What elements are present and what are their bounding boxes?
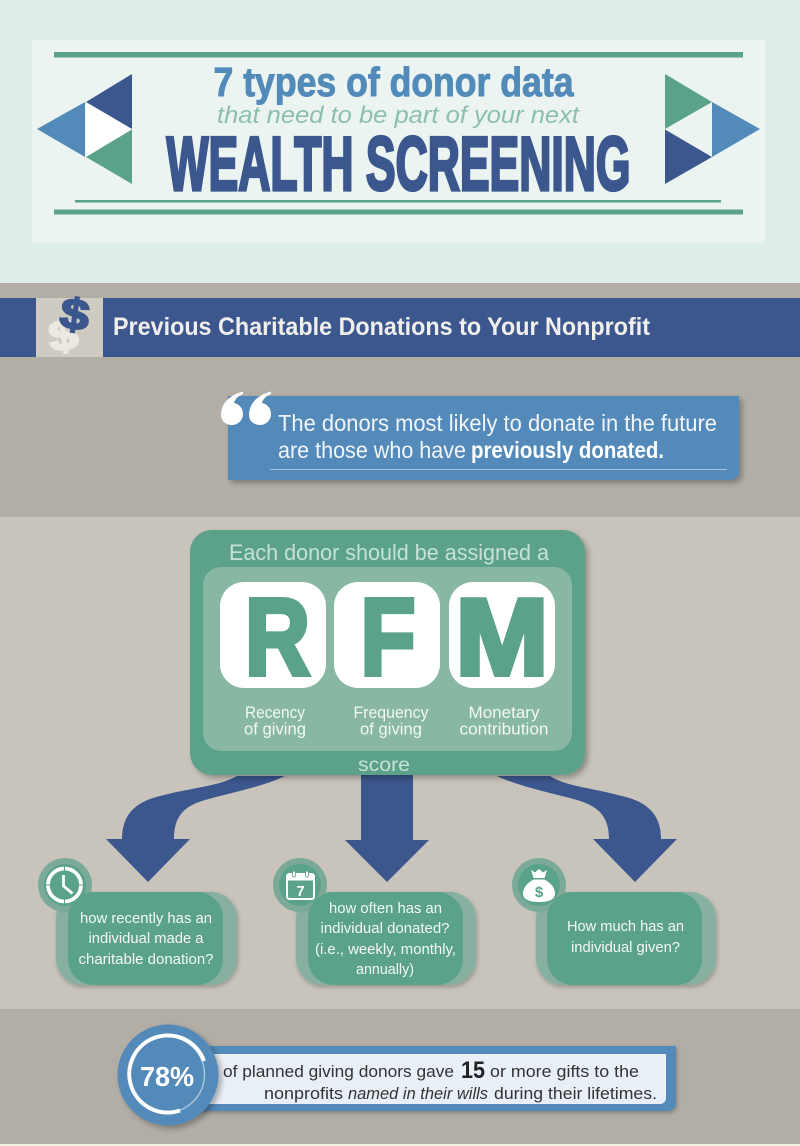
quote text: are those who have bbox=[278, 437, 466, 463]
badge: recency bbox=[38, 858, 92, 912]
card text: how recently has an bbox=[80, 910, 212, 927]
arrow: to recency bbox=[106, 776, 285, 882]
statistic text: of planned giving donors gave bbox=[223, 1062, 454, 1081]
tile: F: F bbox=[360, 576, 416, 698]
subheading: that need to be part of your next bbox=[217, 102, 580, 129]
card text: individual given? bbox=[571, 939, 680, 956]
card text: annually) bbox=[356, 961, 414, 978]
labels: recency frequency monetary: Recency bbox=[245, 704, 306, 722]
tile: F bbox=[334, 576, 440, 698]
section background: rfm bbox=[0, 517, 800, 1009]
icon: dollar signs: $ bbox=[46, 310, 81, 362]
labels: recency frequency monetary: Frequency bbox=[354, 704, 429, 722]
arrow: to frequency bbox=[345, 775, 429, 882]
card text: (i.e., weekly, monthly, bbox=[315, 941, 456, 958]
label: score: score bbox=[358, 755, 410, 776]
card text bbox=[567, 918, 684, 956]
footer edge bbox=[0, 1144, 800, 1146]
section background: statistic bbox=[0, 1009, 800, 1144]
card text bbox=[315, 900, 456, 978]
stat circle: 78% bbox=[118, 1024, 218, 1126]
statistic text: 15 bbox=[461, 1057, 485, 1084]
icon: dollar signs: $ bbox=[57, 289, 92, 341]
badge: frequency bbox=[273, 858, 327, 912]
labels: recency frequency monetary: of giving bbox=[244, 720, 306, 738]
arrow: to monetary bbox=[497, 776, 677, 882]
quote text: The donors most likely to donate in the future bbox=[278, 410, 717, 436]
labels: recency frequency monetary: contribution bbox=[460, 720, 548, 738]
statistic text: nonprofits bbox=[264, 1084, 343, 1103]
callout: quote bbox=[221, 392, 739, 480]
quote text: previously donated. bbox=[471, 437, 664, 463]
card: recency bbox=[38, 858, 237, 985]
icon: left triangles bbox=[37, 74, 132, 184]
section background: donations bbox=[0, 283, 800, 517]
tile: M: M bbox=[456, 576, 548, 698]
card text: How much has an bbox=[567, 918, 684, 935]
icon: money bag: $ bbox=[535, 884, 544, 901]
tile: R: R bbox=[245, 576, 310, 698]
panel: section banner bbox=[0, 296, 800, 357]
icon: quote mark bbox=[221, 392, 271, 425]
callout: statistic bbox=[118, 1024, 676, 1126]
labels: recency frequency monetary: Monetary bbox=[468, 704, 540, 722]
statistic text: or more gifts to the bbox=[490, 1062, 639, 1081]
panel: title bbox=[32, 40, 765, 243]
icon: clock bbox=[46, 866, 83, 904]
icon: money bag bbox=[523, 869, 555, 902]
icon: right triangles bbox=[665, 74, 760, 184]
panel: rfm score bbox=[190, 530, 585, 776]
quote text bbox=[278, 410, 717, 463]
card text bbox=[78, 910, 214, 968]
badge: monetary bbox=[512, 858, 566, 912]
statistic text: named in their wills bbox=[348, 1084, 488, 1103]
icon: calendar bbox=[287, 871, 314, 900]
card: frequency bbox=[273, 858, 476, 985]
icon: calendar: 7 bbox=[296, 883, 305, 900]
statistic text: during their lifetimes. bbox=[494, 1084, 657, 1103]
labels: recency frequency monetary: of giving bbox=[360, 720, 422, 738]
heading: 7 types of donor data: 7 types of donor data bbox=[214, 59, 575, 105]
card text: individual made a bbox=[88, 930, 204, 947]
card text: individual donated? bbox=[320, 920, 450, 937]
statistic text bbox=[223, 1057, 657, 1103]
card: monetary bbox=[512, 858, 716, 985]
card text: charitable donation? bbox=[78, 951, 214, 968]
label: each donor: Each donor should be assigned a bbox=[229, 540, 550, 565]
section title: Previous Charitable Donations to Your Nonprofit bbox=[113, 313, 651, 341]
icon: dollar signs bbox=[48, 296, 90, 354]
header background bbox=[0, 0, 800, 283]
stat circle: 78%: 78% bbox=[140, 1061, 194, 1092]
labels: recency frequency monetary bbox=[244, 704, 548, 738]
card text: how often has an bbox=[329, 900, 442, 917]
